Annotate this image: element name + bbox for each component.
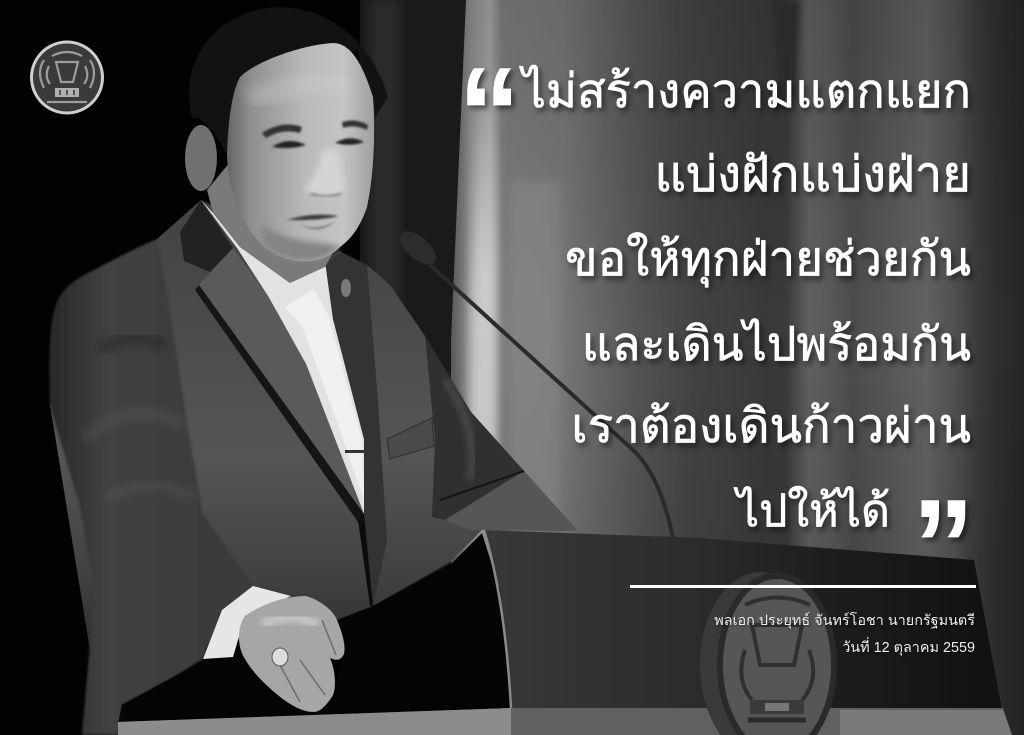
hand with cuff (203, 586, 345, 712)
left sleeve (49, 239, 253, 735)
government seal logo (30, 40, 104, 114)
quote line 6: ไปให้ได้ (737, 487, 890, 536)
person (49, 7, 578, 735)
background curtains (360, 0, 1024, 735)
ear (185, 125, 217, 191)
podium (118, 530, 1012, 735)
divider line (630, 585, 976, 588)
lapel pin (341, 279, 351, 297)
shirt (201, 200, 364, 514)
facial features (250, 80, 368, 261)
quote line 2: แบ่งฝักแบ่งฝ่าย (654, 148, 971, 202)
quote line 3: ขอให้ทุกฝ่ายช่วยกัน (565, 233, 971, 286)
face (227, 43, 374, 261)
podium cloth (118, 533, 511, 724)
jacket body (50, 200, 578, 650)
podium seal (700, 572, 837, 735)
podium ledge (118, 708, 1012, 735)
ring (272, 648, 288, 666)
right sleeve (425, 336, 524, 520)
opening quote mark: “ (458, 41, 520, 187)
quote line 4: และเดินไปพร้อมกัน (582, 318, 971, 370)
quote line 1: ไม่สร้างความแตกแยก (522, 64, 971, 117)
tie (285, 289, 364, 500)
attribution date: วันที่ 12 ตุลาคม 2559 (842, 640, 975, 656)
neck (207, 150, 340, 283)
microphone (394, 225, 673, 538)
closing quote mark: ” (912, 473, 974, 619)
right lapel (325, 251, 387, 606)
podium right panel (484, 530, 1003, 715)
attribution name: พลเอก ประยุทธ์ จันทร์โอชา นายกรัฐมนตรี (714, 613, 975, 629)
hair (189, 7, 388, 155)
pocket (387, 418, 434, 459)
left lapel (199, 248, 364, 514)
quote line 5: เราต้องเดินก้าวผ่าน (571, 400, 971, 453)
